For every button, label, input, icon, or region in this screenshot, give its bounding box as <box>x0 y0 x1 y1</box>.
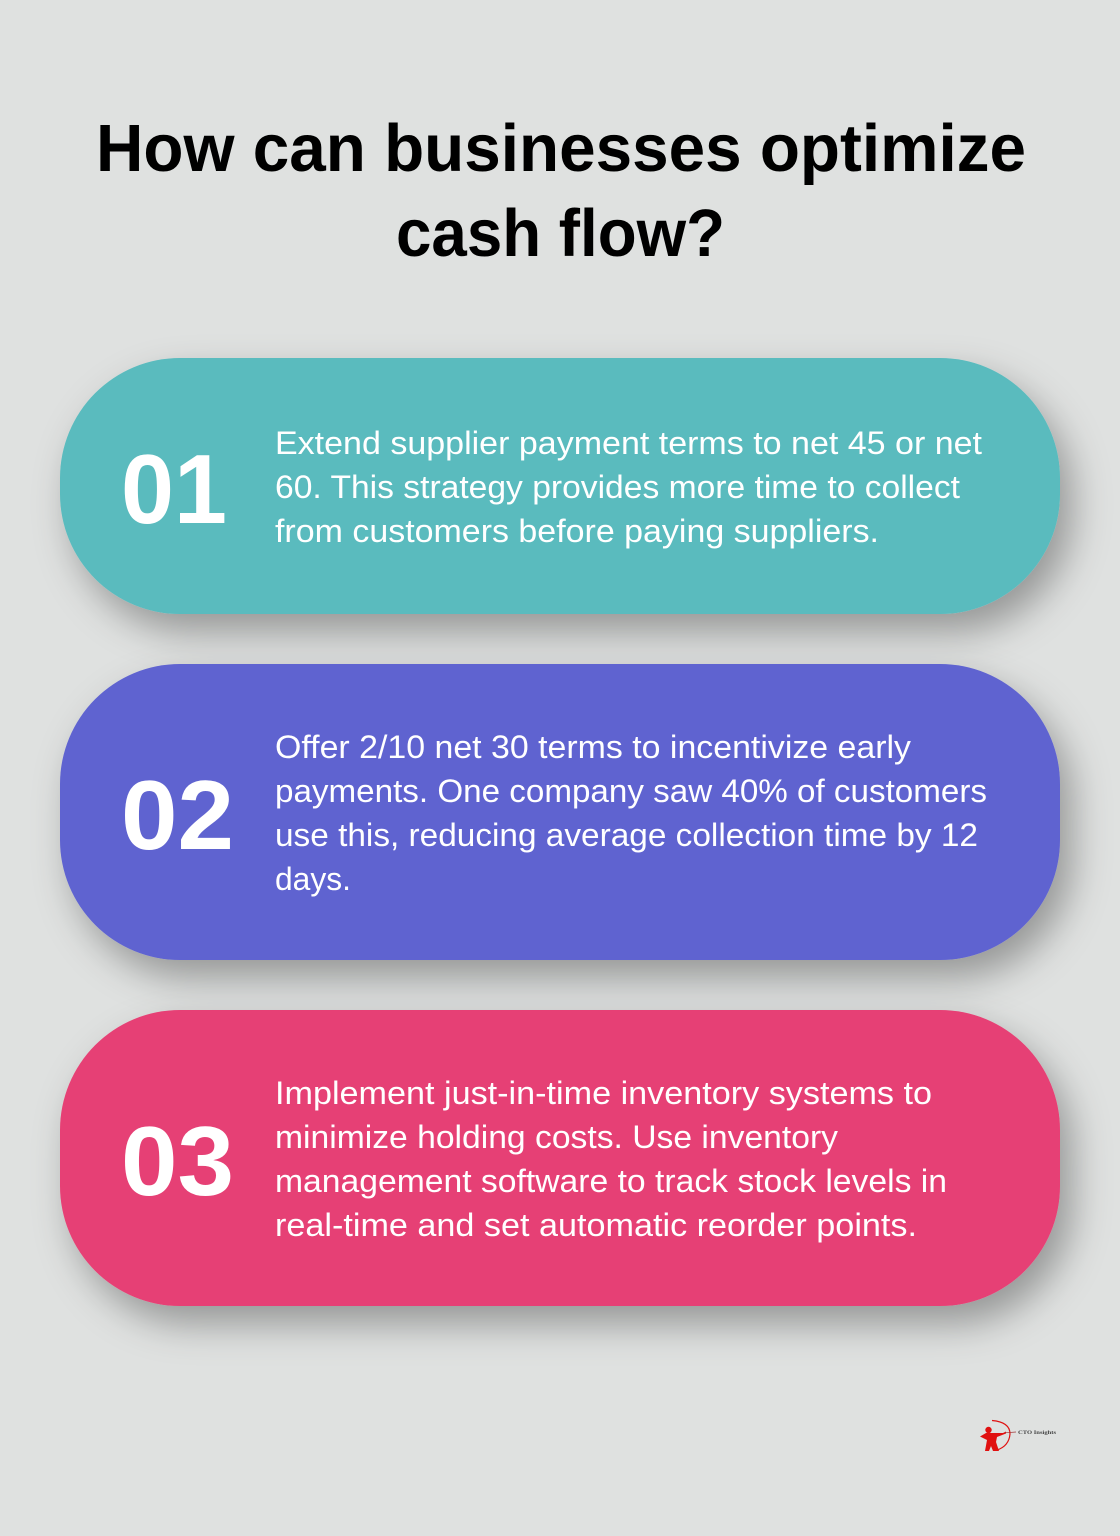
title <box>96 111 1026 271</box>
text: step 03: minimize holding costs. Use inventory <box>275 1119 839 1155</box>
number 01: 01 <box>121 434 227 544</box>
logo: CTO Insights archer: CTO Insights <box>1018 1430 1056 1436</box>
text: step 03: Implement just-in-time inventory systems to <box>275 1075 932 1111</box>
panel: step 01 <box>60 358 1060 614</box>
text: step 02: days. <box>275 861 351 897</box>
text: step 01: Extend supplier payment terms to net 45 or net <box>275 425 982 461</box>
panel: step 03 <box>60 1010 1060 1306</box>
text: step 02 <box>275 729 987 897</box>
number 02: 02 <box>121 760 234 870</box>
panel: step 02 <box>60 664 1060 960</box>
text: step 01 <box>275 425 982 549</box>
title: How can businesses optimize <box>96 111 1026 186</box>
text: step 03: real-time and set automatic reorder points. <box>275 1207 917 1243</box>
text: step 01: 60. This strategy provides more time to collect <box>275 469 960 505</box>
text: step 03 <box>275 1075 947 1243</box>
text: step 01: from customers before paying suppliers. <box>275 513 879 549</box>
title: cash flow? <box>396 196 725 271</box>
logo: CTO Insights archer <box>980 1420 1056 1451</box>
text: step 02: Offer 2/10 net 30 terms to incentivize early <box>275 729 912 765</box>
text: step 02: use this, reducing average collection time by 12 <box>275 817 978 853</box>
text: step 02: payments. One company saw 40% of customers <box>275 773 987 809</box>
text: step 03: management software to track stock levels in <box>275 1163 947 1199</box>
number 03: 03 <box>121 1106 234 1216</box>
